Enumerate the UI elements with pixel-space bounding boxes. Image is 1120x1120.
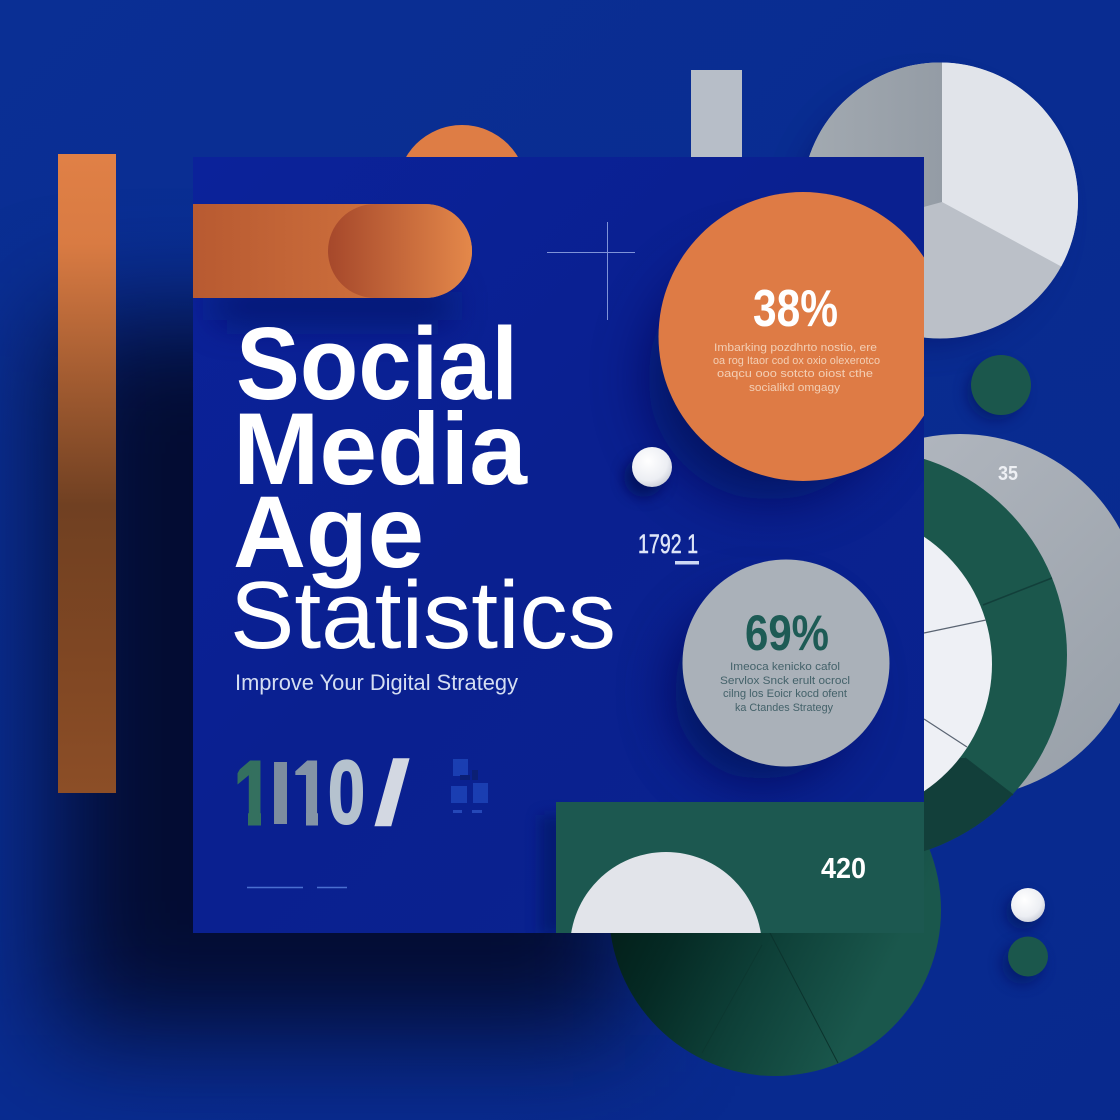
subtitle: Improve Your Digital Strategy — [235, 670, 518, 695]
value: 420: 420 — [821, 853, 866, 885]
stat description: Imeoca kenicko cafol — [730, 661, 840, 673]
title — [230, 306, 616, 669]
big number 1110/: 0 — [328, 743, 365, 843]
orange vertical bar — [58, 154, 116, 793]
stat description: oaqcu ooo sotcto oiost cthe — [717, 368, 873, 380]
number 179.1 — [638, 529, 699, 564]
stat description: oa rog Itaor cod ox oxio olexerotco — [713, 355, 880, 367]
dark green circle — [967, 355, 1031, 420]
stat: 38%: 38% — [753, 280, 838, 338]
big number 1110/: / — [374, 744, 410, 844]
big number 1110/: 1 — [234, 744, 272, 844]
stat: 69%: 69% — [745, 605, 829, 661]
grey rectangle behind panel — [691, 70, 742, 160]
big number 1110/: I — [268, 744, 293, 844]
stat description: ka Ctandes Strategy — [735, 702, 833, 714]
title: Statistics — [230, 562, 616, 669]
green ring chart — [924, 459, 1067, 851]
green panel — [556, 802, 924, 933]
title: Media — [233, 392, 528, 506]
number 179.1: 1792 1 — [638, 529, 698, 559]
white ball — [632, 447, 672, 487]
white half circle — [571, 852, 761, 933]
big number 1110/: 1 — [292, 744, 328, 844]
stat description: cilng los Eoicr kocd ofent — [723, 688, 847, 700]
white pie circle — [686, 511, 992, 817]
bottom dark green pie — [609, 744, 941, 1076]
title: Age — [233, 475, 424, 589]
label: 35: 35 — [998, 463, 1018, 485]
orange half circle behind panel — [397, 125, 527, 255]
small bar icon — [451, 759, 488, 813]
decorative dashes — [247, 886, 347, 888]
soft shadow behind pie chart — [800, 90, 1050, 340]
big number 1110/ — [238, 758, 410, 826]
main panel — [193, 157, 924, 933]
stat description — [720, 661, 850, 714]
orange pill — [193, 204, 472, 298]
stat description — [713, 342, 880, 394]
small green ball — [1002, 936, 1048, 984]
small white ball — [1006, 888, 1045, 929]
stat description: Servlox Snck erult ocrocl — [720, 675, 850, 687]
pie chart: top right — [809, 62, 1078, 338]
thin cross — [547, 222, 635, 320]
title: Social — [236, 306, 518, 421]
stat description: Imbarking pozdhrto nostio, ere — [714, 342, 877, 354]
grey large circle — [778, 434, 1120, 798]
orange stat circle — [658, 192, 948, 481]
grey stat circle — [682, 560, 890, 766]
stat description: socialikd omgagy — [749, 382, 841, 394]
